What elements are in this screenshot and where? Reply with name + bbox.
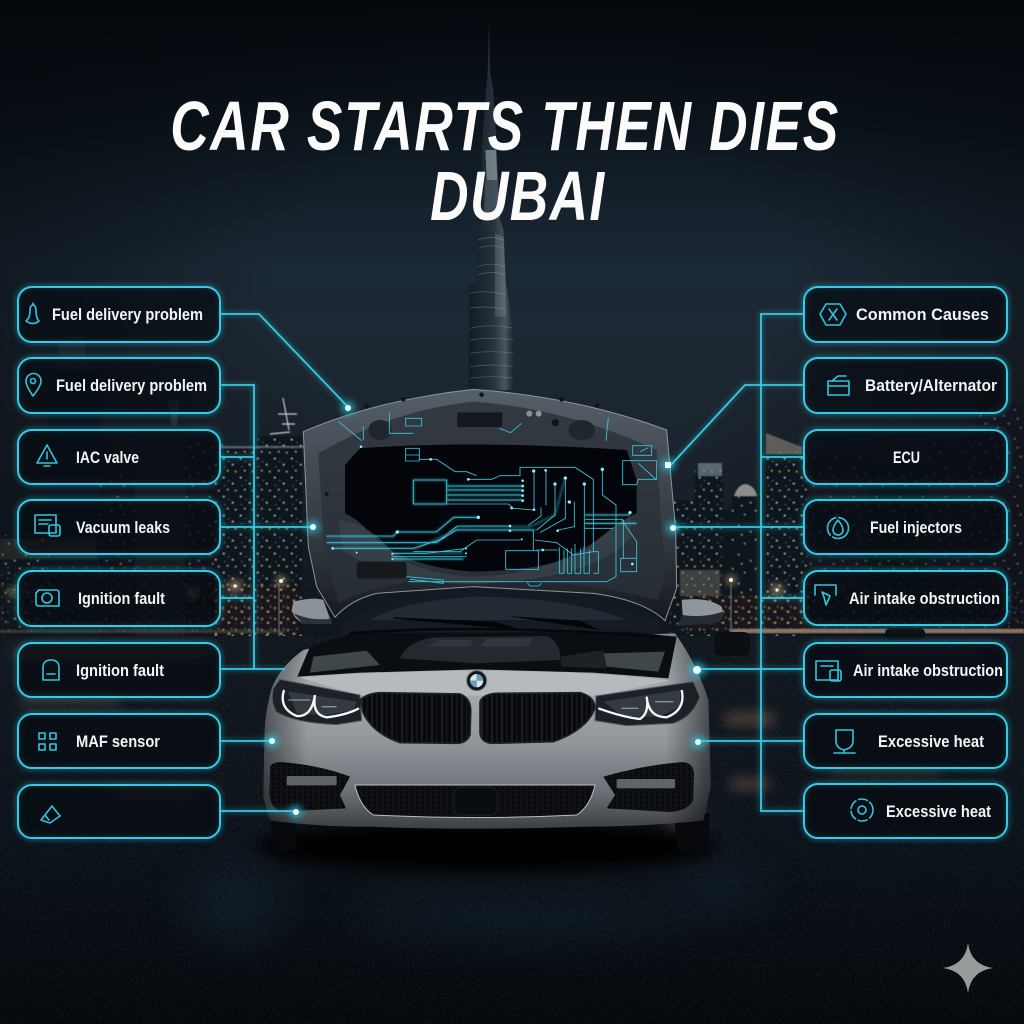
panel: IAC valve [18, 430, 220, 484]
kidney grille [360, 693, 595, 743]
panel: fuel delivery problem 1 [18, 287, 220, 342]
city skyline [0, 330, 1024, 640]
panel: excessive heat 1: Excessive heat [878, 732, 984, 751]
panel: excessive heat 2: Excessive heat [886, 802, 991, 821]
panel: fuel delivery problem 1: Fuel delivery problem [52, 305, 203, 324]
panel: common causes: Common Causes [856, 305, 989, 324]
windshield [340, 592, 660, 643]
panel: battery/alternator [804, 358, 1007, 413]
body shell [263, 633, 711, 829]
panel: fuel delivery problem 2 [18, 358, 220, 413]
panel: ignition fault 2: Ignition fault [76, 661, 164, 680]
panel: air intake obstruction 1: Air intake obstruction [849, 589, 1000, 608]
title [170, 88, 838, 236]
circuit diagram overlay [327, 413, 657, 586]
connector end dots [266, 402, 704, 818]
panel: fuel injectors: Fuel injectors [870, 518, 962, 537]
panel: air intake obstruction 2: Air intake obstruction [853, 661, 1003, 680]
panel: fuel injectors [804, 500, 1007, 554]
connector lines [220, 314, 804, 811]
panel: MAF sensor [18, 714, 220, 768]
road surface [0, 628, 1024, 1024]
title: CAR STARTS THEN DIES [170, 88, 838, 166]
panel: excessive heat 2 [804, 784, 1007, 838]
panel: ignition fault 1 [18, 571, 220, 626]
shadow under car [257, 822, 717, 872]
panel: ignition fault 1: Ignition fault [78, 589, 165, 608]
lower bumper intake [355, 785, 595, 817]
title: DUBAI [430, 158, 606, 236]
panel: vacuum leaks: Vacuum leaks [76, 518, 170, 537]
right label panels [804, 287, 1007, 838]
street lights [8, 575, 783, 640]
headlight left [272, 679, 362, 725]
panel: unlabeled tool [18, 785, 220, 838]
panel: vacuum leaks [18, 500, 220, 554]
left label panels [18, 287, 1007, 838]
BMW badge [467, 671, 487, 691]
panel: ECU [804, 430, 1007, 484]
open bonnet [303, 389, 677, 621]
bonnet lip [299, 671, 669, 696]
wheels [269, 813, 710, 853]
panel: air intake obstruction 1 [804, 571, 1007, 625]
panel: fuel delivery problem 2: Fuel delivery problem [56, 376, 207, 395]
fog lamp right [603, 762, 694, 812]
night sky background [0, 0, 1024, 640]
sparkle watermark [943, 943, 993, 993]
panel: common causes [804, 287, 1007, 342]
headlight right [595, 682, 700, 726]
Burj Khalifa tower [469, 22, 514, 390]
panel: ignition fault 2 [18, 643, 220, 697]
panel: MAF sensor: MAF sensor [76, 732, 160, 751]
side mirrors [292, 599, 723, 626]
panel: excessive heat 1 [804, 714, 1007, 768]
fog lamp left [269, 762, 350, 812]
panel: battery/alternator: Battery/Alternator [865, 376, 997, 395]
box glow layer [18, 287, 1007, 838]
car with open hood [257, 389, 723, 872]
panel: ECU: ECU [893, 448, 920, 467]
panel: IAC valve: IAC valve [76, 448, 139, 467]
engine bay [297, 629, 677, 678]
panel: air intake obstruction 2 [804, 643, 1007, 697]
